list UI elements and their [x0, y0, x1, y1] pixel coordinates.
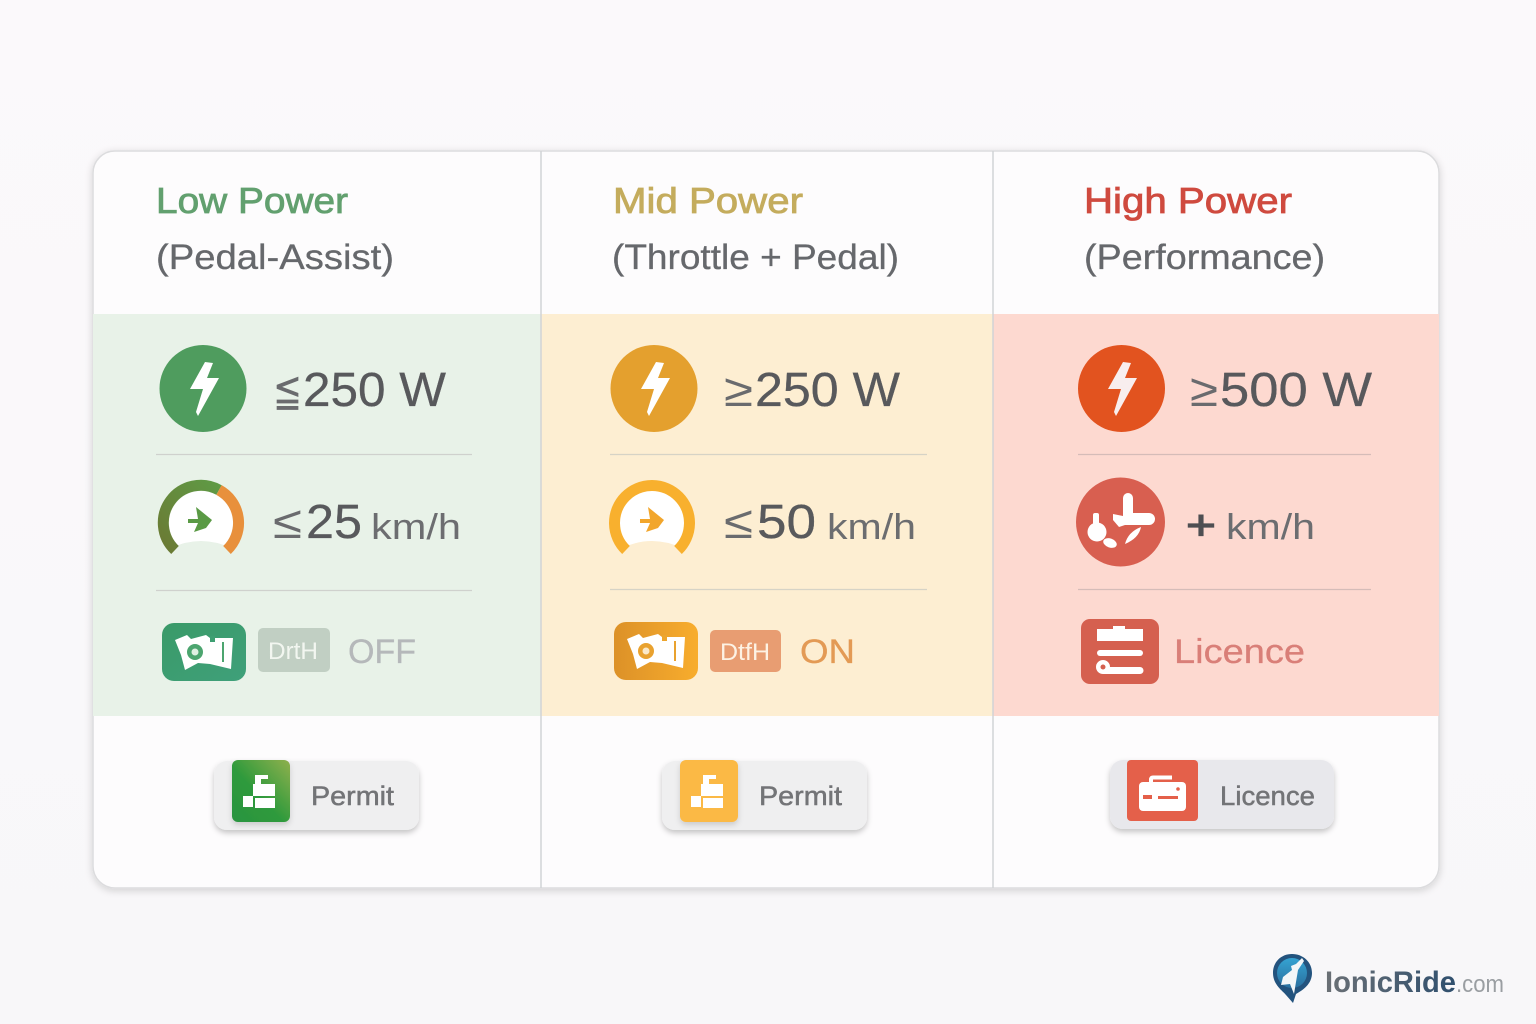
power value: ≦ [273, 364, 302, 416]
icon: amber throttle [614, 622, 698, 680]
brand name: IonicRide [1325, 966, 1456, 999]
permit button [662, 760, 867, 830]
throttle state on: ON [800, 633, 855, 671]
speed value [273, 496, 461, 549]
icon: red performance gauge [1076, 478, 1165, 566]
icon: green throttle [162, 623, 246, 681]
icon: amber permit [680, 760, 738, 822]
permit button: Permit [759, 781, 843, 811]
speed value: 50 [757, 496, 816, 549]
speed value: ≤ [273, 496, 302, 548]
icon: red briefcase [1127, 760, 1198, 821]
throttle badge: DrtH [268, 638, 318, 665]
speed value: ≤ [724, 496, 753, 548]
heading: mid power: Mid Power [613, 180, 803, 221]
throttle state off: OFF [348, 633, 416, 671]
subheading: pedal-assist: (Pedal-Assist) [156, 238, 394, 277]
heading: high power: High Power [1084, 180, 1292, 221]
licence button: Licence [1220, 781, 1315, 811]
power value: ≥ [1190, 364, 1218, 416]
subheading: performance: (Performance) [1084, 238, 1325, 277]
speed value [1186, 501, 1315, 548]
brand domain: .com [1456, 971, 1504, 998]
throttle badge [258, 628, 330, 672]
power value: ≥ [724, 364, 753, 416]
licence requirement text: Licence [1174, 633, 1305, 671]
icon: red power bolt [1078, 345, 1165, 432]
speed value: + [1186, 501, 1216, 548]
throttle badge: DtfH [720, 639, 770, 666]
speed value [724, 496, 916, 549]
icon: green speed gauge [163, 485, 239, 562]
icon: amber speed gauge [615, 485, 690, 562]
panel: high power [1076, 180, 1373, 829]
icon: amber power bolt [610, 345, 698, 432]
icon: green permit [232, 760, 290, 822]
speed value: km/h [827, 506, 916, 547]
panel: mid power [610, 180, 927, 830]
speed value: km/h [1226, 506, 1315, 547]
speed value: 25 [306, 496, 362, 549]
icon: green power bolt [160, 345, 246, 432]
panel: low power [156, 180, 472, 830]
licence button [1110, 760, 1334, 829]
heading: low power: Low Power [156, 180, 348, 221]
power value: 250 W [303, 364, 447, 417]
permit button: Permit [311, 781, 395, 811]
permit button [214, 760, 419, 830]
subheading: throttle + pedal: (Throttle + Pedal) [612, 238, 899, 277]
logo: IonicRide [1273, 954, 1504, 1003]
throttle badge [710, 630, 781, 672]
icon: red licence document [1081, 619, 1159, 684]
icon: location pin [1273, 954, 1312, 1003]
speed value: km/h [371, 506, 461, 547]
power value: 500 W [1220, 364, 1373, 417]
power value: 250 W [755, 364, 901, 417]
comparison card [93, 151, 1439, 888]
